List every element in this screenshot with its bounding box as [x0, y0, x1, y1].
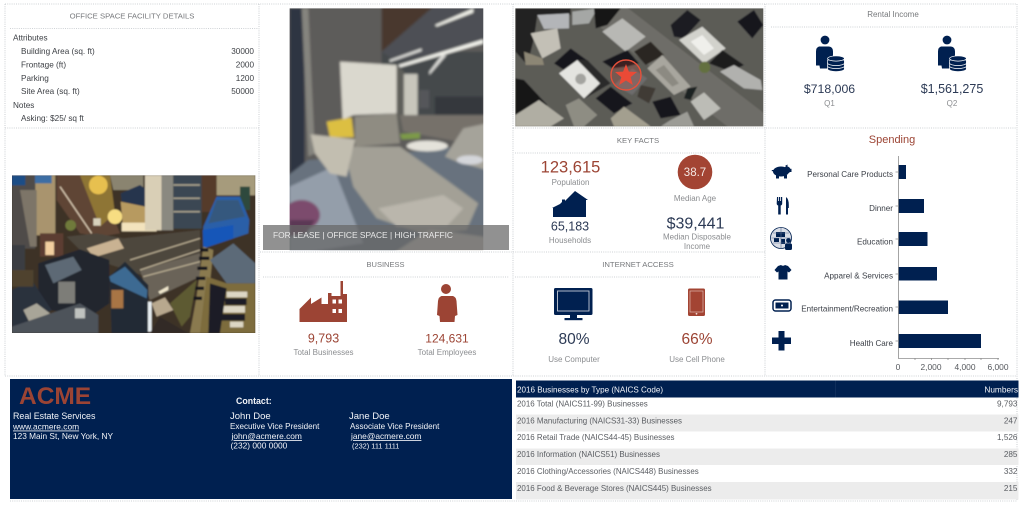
contact: John Doe: John Doe	[230, 411, 271, 422]
table: businesses by type: 2016 Retail Trade (NAICS44-45) Businesses	[517, 433, 675, 442]
bar chart: 6,000	[988, 362, 1009, 372]
table: businesses by type: 2016 Manufacturing (NAICS31-33) Businesses	[517, 416, 682, 426]
attributes table: 1200	[236, 74, 254, 83]
bar chart: 0	[896, 362, 901, 372]
icon: ticket	[773, 300, 791, 311]
table: businesses by type: 215	[1004, 484, 1018, 493]
stat: median disposable income	[663, 216, 732, 251]
panel: rental income	[804, 10, 983, 108]
panel: office space facility details	[13, 12, 254, 123]
icon: factory	[300, 281, 347, 322]
attributes table: Frontage (ft)	[21, 60, 66, 70]
table header: Numbers	[984, 384, 1018, 394]
icon: globe with person	[770, 228, 792, 250]
company details	[12, 411, 114, 441]
contact: John Doe: Executive Vice President	[230, 422, 320, 431]
bar chart: Dinner	[869, 204, 893, 213]
stat: use cell phone: Use Cell Phone	[669, 355, 725, 364]
icon: person with coins Q2	[938, 36, 966, 72]
panel: key facts	[541, 136, 732, 251]
table: businesses by type: 9,793	[997, 400, 1018, 408]
map marker: star	[611, 60, 641, 90]
table: businesses by type: 2016 Clothing/Accessories (NAICS448) Businesses	[517, 467, 699, 476]
attributes table: 2000	[236, 60, 254, 70]
caption band	[263, 225, 509, 250]
table: businesses by type: 2016 Information (NAICS51) Businesses	[517, 450, 660, 459]
stat: total businesses: 9,793	[308, 332, 339, 346]
contact heading: Contact:	[236, 396, 272, 406]
bar chart: Apparel & Services	[824, 272, 893, 280]
stat: population: 123,615	[541, 158, 600, 176]
panel: business	[293, 260, 476, 357]
bar chart	[801, 156, 1009, 372]
attributes table: Parking	[21, 74, 49, 83]
icon: person with coins Q1	[816, 36, 844, 72]
heading: internet access: INTERNET ACCESS	[602, 260, 674, 269]
contact: John Doe: john@acmere.com	[230, 431, 302, 441]
photo: office lounge	[263, 0, 509, 260]
value: Q2 income: $1,561,275	[921, 82, 983, 96]
contact: John Doe	[230, 411, 320, 450]
table: businesses by type: 285	[1004, 450, 1018, 459]
logo: ACME: ACME	[19, 383, 91, 410]
contact: Jane Doe: Associate Vice President	[350, 422, 440, 431]
caption band: FOR LEASE | OFFICE SPACE | HIGH TRAFFIC	[273, 230, 453, 240]
attributes table: Site Area (sq. ft)	[21, 87, 80, 96]
stat: total employees	[418, 332, 476, 357]
table: businesses by type: 247	[1004, 416, 1018, 426]
heading: facility details: OFFICE SPACE FACILITY DETAILS	[70, 12, 194, 20]
table header	[516, 380, 1018, 398]
stat: total businesses: Total Businesses	[293, 348, 354, 357]
stat: population: Population	[552, 178, 589, 187]
icon: medical cross	[772, 331, 791, 350]
stat: households: Households	[549, 236, 591, 245]
attributes table: 50000	[231, 87, 254, 96]
contact: John Doe: (232) 000 0000	[230, 440, 288, 450]
bar chart: Entertainment/Recreation	[801, 304, 893, 314]
stat: median age	[674, 155, 717, 203]
icon: piggy bank	[772, 164, 792, 178]
panel: internet access	[548, 260, 725, 364]
attributes table: Attributes	[13, 34, 48, 42]
contact: Jane Doe: jane@acmere.com	[350, 431, 421, 441]
stat: use cell phone: 66%	[681, 331, 713, 348]
stat: population	[541, 158, 600, 187]
company details: Real Estate Services	[13, 411, 96, 421]
stat: total businesses	[293, 332, 354, 357]
table: businesses by type: 1,526	[997, 433, 1018, 442]
stat: use cell phone	[669, 331, 725, 364]
stat: median age: 38.7	[684, 167, 706, 179]
bar chart: 2,000	[921, 362, 942, 372]
attributes table: Building Area (sq. ft)	[21, 47, 95, 56]
attributes table	[13, 34, 254, 123]
stat: median age: Median Age	[674, 194, 717, 203]
heading: rental income: Rental Income	[867, 10, 919, 19]
heading: spending: Spending	[869, 134, 915, 146]
company details: 123 Main St, New York, NY	[13, 431, 114, 441]
heading: business: BUSINESS	[367, 260, 404, 269]
company details: www.acmere.com	[12, 422, 79, 432]
icon: cutlery	[777, 197, 789, 214]
contact: Jane Doe	[349, 411, 440, 450]
label: Q1: Q1	[824, 99, 835, 108]
stat: use computer: Use Computer	[548, 355, 600, 364]
stat: total employees: 124,631	[425, 332, 469, 346]
heading: key facts: KEY FACTS	[617, 136, 659, 145]
value: Q1 income: $718,006	[804, 82, 855, 96]
table: businesses by type: 2016 Total (NAICS11-99) Businesses	[517, 400, 648, 408]
bar chart: 4,000	[955, 362, 976, 372]
bar chart: Health Care	[850, 339, 893, 348]
table: businesses by type	[516, 380, 1018, 500]
label: Q2: Q2	[947, 99, 958, 108]
stat: median disposable income: Median Disposable	[663, 232, 732, 242]
stat: median disposable income: $39,441	[667, 216, 725, 232]
stat: use computer: 80%	[558, 331, 590, 348]
contact: Jane Doe: Jane Doe	[349, 411, 390, 422]
attributes table: 30000	[231, 47, 254, 56]
photo: aerial map	[515, 8, 764, 126]
icon: computer monitor	[554, 288, 592, 320]
stat: use computer	[548, 331, 600, 364]
panel: contact banner	[10, 379, 512, 499]
attributes table: Asking: $25/ sq ft	[21, 114, 85, 123]
panel: spending bar chart	[770, 134, 1009, 372]
photo: city at night	[12, 175, 256, 333]
stat: median disposable income: Income	[684, 242, 711, 251]
icon: person	[437, 284, 458, 322]
stat: total employees: Total Employees	[418, 348, 476, 357]
bar chart: Education	[857, 238, 893, 246]
table: businesses by type: 2016 Food & Beverage Stores (NAICS445) Businesses	[517, 484, 712, 493]
contact: Jane Doe: (232) 111 1111	[352, 442, 399, 450]
table: businesses by type: 332	[1004, 467, 1018, 476]
bar chart: Personal Care Products	[807, 170, 893, 179]
icon: cell phone	[688, 288, 705, 316]
icon: t-shirt	[774, 265, 792, 280]
stat: households	[549, 191, 591, 245]
attributes table: Notes	[13, 101, 34, 110]
stat: households: 65,183	[551, 220, 589, 234]
table header: 2016 Businesses by Type (NAICS Code)	[517, 386, 663, 394]
